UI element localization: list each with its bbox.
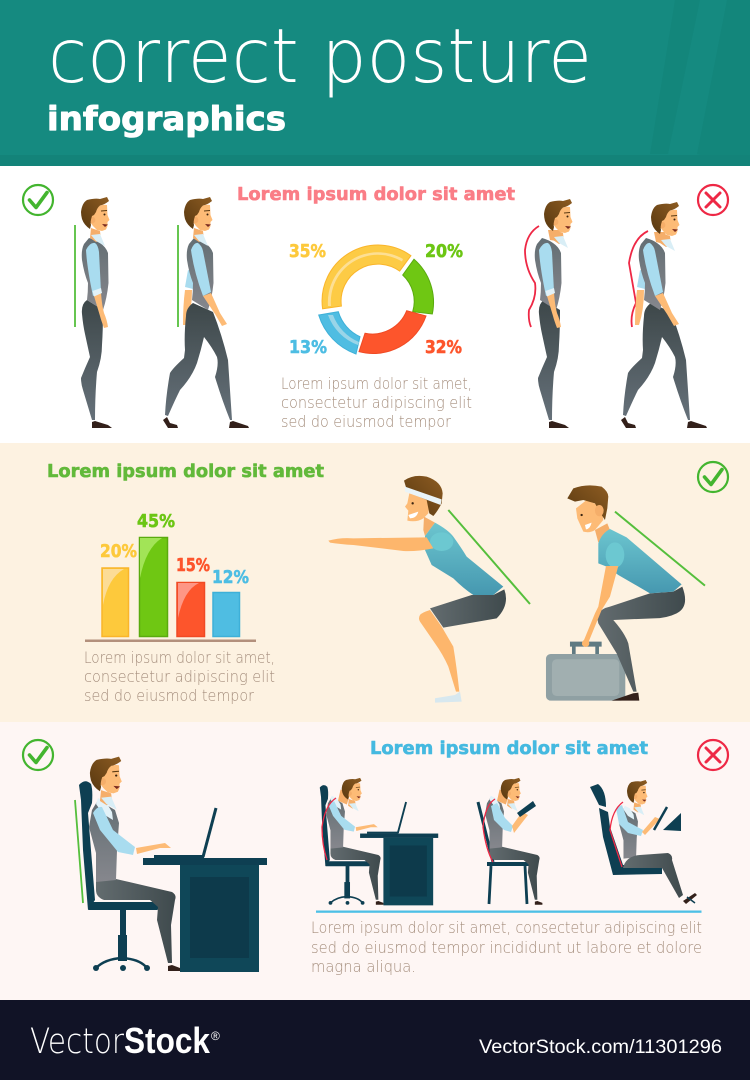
donut labels: 13% (289, 337, 327, 358)
figure: squat with headband (328, 476, 530, 703)
footer logo: Vector (30, 1022, 125, 1062)
panel: sitting (0, 722, 750, 1000)
bar labels: 12% (212, 567, 249, 588)
figure: good walking posture (163, 197, 249, 428)
figure: good standing posture (75, 197, 112, 428)
icon: correct check (23, 185, 53, 215)
bar labels: 15% (176, 555, 210, 576)
figure: correct sitting at desk (75, 757, 267, 972)
text block: Lorem ipsum dolor sit amet, (84, 648, 275, 667)
bar labels: 20% (100, 541, 137, 562)
icon: incorrect cross (698, 740, 728, 770)
panel: header (0, 0, 750, 166)
bar labels (100, 511, 249, 588)
figure: slouching reading a book (478, 778, 542, 905)
text block (311, 918, 702, 976)
icon: correct check (23, 740, 53, 770)
heading: blue: Lorem ipsum dolor sit amet (370, 738, 648, 759)
footer (0, 1000, 750, 1080)
donut labels: 35% (289, 241, 326, 262)
figure: bad standing posture (525, 199, 572, 428)
figure: bad walking posture (621, 202, 707, 428)
heading: pink: Lorem ipsum dolor sit amet (237, 184, 515, 205)
icon: correct check (698, 462, 728, 492)
footer logo: Stock (124, 1020, 211, 1061)
text block (84, 648, 275, 705)
ground line (316, 910, 702, 913)
bar labels: 45% (137, 511, 175, 532)
icon: incorrect cross (698, 185, 728, 215)
text block: magna aliqua. (311, 957, 416, 976)
text block: Lorem ipsum dolor sit amet, consectetur adipiscing elit (311, 918, 702, 937)
subtitle: infographics (47, 99, 286, 138)
text block: sed do eiusmod tempor incididunt ut labore et dolore (311, 938, 702, 957)
figure: slouching at desk (320, 778, 438, 905)
figure: lifting suitcase (546, 485, 705, 701)
donut chart (319, 245, 434, 354)
text block: consectetur adipiscing elit (84, 667, 275, 686)
footer url: VectorStock.com/11301296 (479, 1037, 722, 1058)
footer logo: ® (211, 1029, 220, 1043)
title: correct posture (48, 12, 592, 100)
text block (281, 374, 472, 431)
panel: lifting (0, 443, 750, 722)
footer logo (30, 1020, 220, 1062)
text block: consectetur adipiscing elit (281, 393, 472, 412)
donut labels: 32% (425, 337, 462, 358)
text block: sed do eiusmod tempor (281, 412, 451, 431)
bar chart (85, 538, 256, 642)
text block: Lorem ipsum dolor sit amet, (281, 374, 472, 393)
donut labels (289, 241, 463, 358)
heading: green: Lorem ipsum dolor sit amet (47, 461, 324, 482)
figure: slouching while driving (590, 780, 697, 904)
text block: sed do eiusmod tempor (84, 686, 254, 705)
panel: standing and walking (0, 166, 750, 443)
donut labels: 20% (425, 241, 463, 262)
